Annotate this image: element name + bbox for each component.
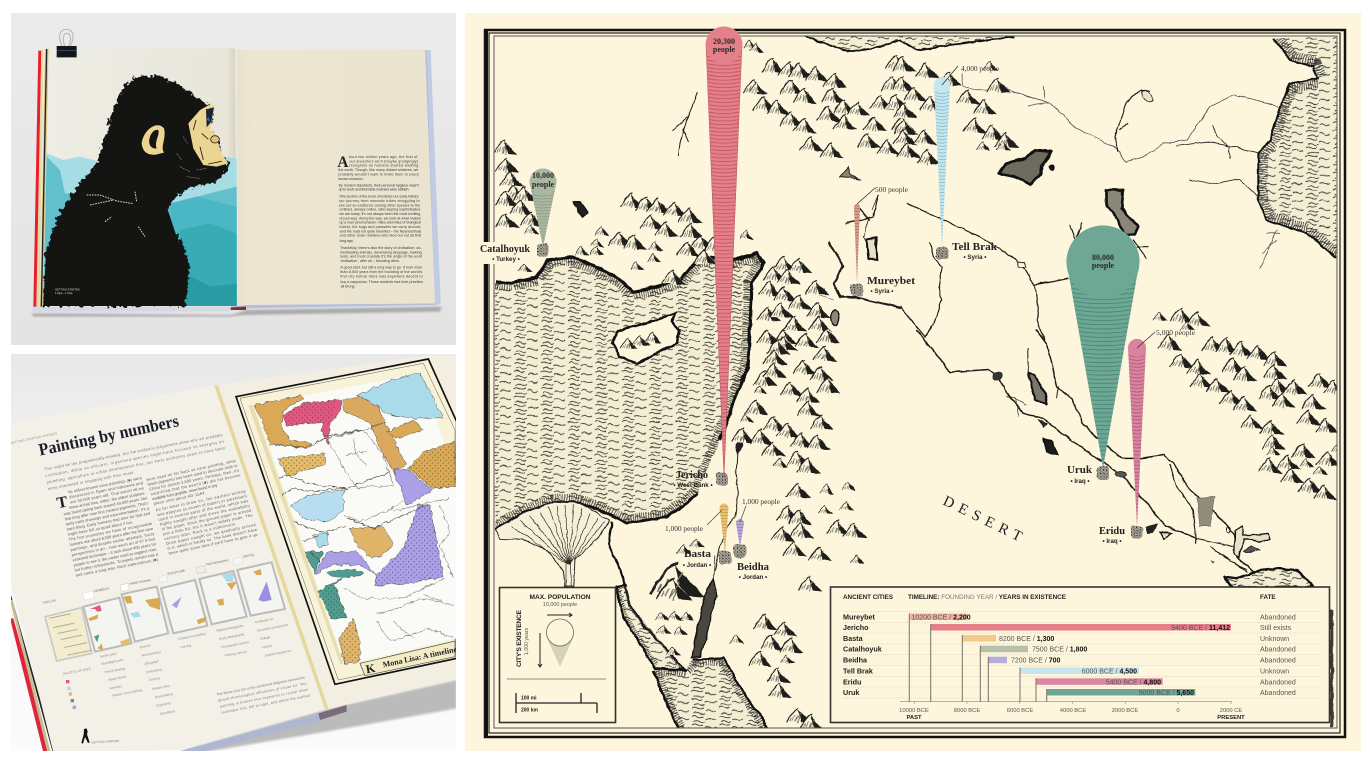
timeline headers xyxy=(843,594,1276,601)
row: Beidha: Abandoned xyxy=(1260,658,1296,665)
city: Catalhoyuk xyxy=(476,168,556,264)
column one: hard thing. Early humans had time for that and xyxy=(66,511,151,532)
axis: 10000 BCE xyxy=(899,708,929,714)
city name: Uruk xyxy=(1067,464,1093,476)
ape face xyxy=(177,104,228,178)
cone xyxy=(736,506,746,547)
legend box xyxy=(500,588,616,722)
row: Uruk: Abandoned xyxy=(1260,690,1296,697)
city: Jericho xyxy=(673,26,742,489)
marsh lakes xyxy=(1028,373,1047,405)
thumbnail captions: Mosaic Cave painting xyxy=(112,688,143,698)
thumbnail captions: Collage xyxy=(259,635,271,641)
cone xyxy=(1128,332,1155,527)
intro text block: up a man (short answer: miles and miles of biological xyxy=(339,221,421,225)
intro paragraph: more interested in engaging with their muse. xyxy=(47,470,135,491)
column one: fairly early drawings and experimentation. It's a xyxy=(65,505,150,527)
intro paragraph: plumbing, agriculture or urban development first, our early ancestors seem to have been xyxy=(46,445,225,485)
caption bar: Mona Lisa: A timeline of xyxy=(382,643,467,669)
intro text block: all wrong. xyxy=(341,285,355,289)
intro text block: and other close relatives who died out not all that xyxy=(340,234,421,238)
timeline headers: TIMELINE: FOUNDING YEAR / YEARS IN EXISTENCE xyxy=(908,594,1066,601)
desert label: DESERT xyxy=(940,493,1030,548)
row: Basta: Unknown xyxy=(1260,636,1289,643)
axis: 4000 BCE xyxy=(1060,708,1086,714)
thumbnail captions: Embossing xyxy=(146,667,162,674)
axis: 8000 BCE xyxy=(954,708,980,714)
axis: 2000 BCE xyxy=(1112,708,1138,714)
intro text block: our journey from nomadic tribes struggling to xyxy=(339,199,420,203)
city: Tell Brak: • Syria • xyxy=(964,254,986,261)
axis xyxy=(899,702,1245,721)
row: Mureybet: 10200 BCE / 2,200 xyxy=(912,614,971,622)
row: Catalhoyuk: 7500 BCE / 1,800 xyxy=(1032,647,1087,654)
row: Tell Brak: Unknown xyxy=(1260,668,1289,676)
city: Uruk: people xyxy=(1092,261,1115,270)
legend swatches above thumbnails: PRINT MAKING xyxy=(129,578,152,586)
scale bar: 200 km xyxy=(521,708,539,714)
column two: surprising that the pencil (■) did not become xyxy=(150,472,242,496)
page note: global chronological influences of visual art. The xyxy=(218,682,307,703)
intro text block: our ancestors we'd (maybe grudgingly) xyxy=(349,159,418,163)
ape ear xyxy=(142,125,165,155)
intro text block: recognise as humans started walking xyxy=(349,164,418,168)
map artwork xyxy=(493,34,1347,730)
panel: map background xyxy=(465,13,1361,751)
population callout: 5,000 people xyxy=(1156,328,1196,337)
page note: technique first, left to right, and where the method xyxy=(221,694,310,715)
thumbnail captions: Ancestry xyxy=(109,684,123,690)
intro text block: Thankfully, there's also the story of civilisation: do- xyxy=(340,246,422,250)
row: Tell Brak: Tell Brak xyxy=(843,666,873,676)
panel: book photo with painting by numbers spread: GETTING STARTED ANCIENT xyxy=(9,431,58,445)
row: Eridu xyxy=(843,677,1296,702)
row: Eridu: 5400 BCE / 4,800 xyxy=(1106,679,1161,686)
column two: was papyrus (a cousin of paper) or parchment xyxy=(156,493,248,517)
intro text block: A xyxy=(337,154,348,171)
row: Tell Brak xyxy=(843,666,1289,702)
thumbnail captions: Geometric perspective xyxy=(257,623,289,633)
intro text block: A good start, but still a long way to go. It took more xyxy=(340,266,422,270)
cone xyxy=(1066,226,1140,468)
binder clip xyxy=(57,29,77,57)
intro text block: probably wouldn't want to invite them to every xyxy=(338,172,419,176)
cone xyxy=(854,204,860,283)
intro text block: the earth. Though, like many distant relatives, we xyxy=(338,168,418,172)
intro text block: bout two million years ago, the first of xyxy=(349,155,418,159)
intro paragraph: civilisation. While an efficient, organised species might have focused its energies on xyxy=(45,439,224,478)
column one: discovered in Spain and Indonesia and xyxy=(69,480,143,499)
cone xyxy=(707,504,728,553)
city name: Jericho xyxy=(676,469,708,481)
page note xyxy=(216,675,310,715)
thumbnail captions: TIMELINE xyxy=(42,598,57,605)
row: Beidha: 7200 BCE / 700 xyxy=(1011,658,1061,665)
Jordan valley xyxy=(715,442,743,570)
axis: PAST xyxy=(906,715,922,721)
Sinai mountains xyxy=(650,563,824,730)
thumbnail captions xyxy=(42,598,291,716)
caption on illustration: GETTING STARTED xyxy=(55,287,80,291)
column one: humans are about 8,500 years after the first cave xyxy=(69,526,154,547)
city name: Basta xyxy=(684,548,712,560)
coloured page edges xyxy=(33,49,49,307)
thumbnail captions: Photograph camera xyxy=(221,640,249,649)
ape silhouette xyxy=(43,75,229,306)
colour key xyxy=(66,680,76,709)
scale bar xyxy=(516,693,597,714)
column one: and came a long way. Rock watercolours (■). xyxy=(75,557,160,578)
colour regions xyxy=(255,373,455,665)
height arrow xyxy=(538,633,542,667)
city name: Tell Brak xyxy=(952,241,998,253)
page note: painting is broken into segments to reveal when xyxy=(219,688,309,709)
column two: place until about AD 1564. xyxy=(153,490,206,506)
timeline headers: ANCIENT CITIES xyxy=(843,594,893,601)
legend swatches above thumbnails: PIGMENTS xyxy=(93,586,109,593)
intro text block: civilised, always-online, latte-sipping sophisticates xyxy=(339,208,421,212)
column one: was found dating back around 40,000 years. Not xyxy=(63,495,148,516)
city name: Eridu xyxy=(1099,525,1125,537)
city: Catalhoyuk: • Turkey • xyxy=(492,256,520,263)
row: Basta: 8200 BCE / 1,300 xyxy=(999,636,1054,643)
panel: book photo with painting by numbers spread xyxy=(9,354,467,753)
intro text block: eke out an existence among other species to the xyxy=(339,203,420,207)
thumbnail captions: Mosaic Inlay xyxy=(152,684,170,691)
column one xyxy=(55,475,160,579)
column one: people to see it, the earlier used to suggest man, xyxy=(73,546,158,567)
thumbnail captions: Carving xyxy=(180,643,192,649)
thumbnail captions: Wood printing xyxy=(141,650,161,658)
column two: of the paper. Once the ground paper is around xyxy=(161,508,252,532)
axis: 2000 CE xyxy=(1220,708,1242,714)
panel: book photo with painting by numbers spread: GETTING STARTED xyxy=(92,739,120,744)
column one: might have felt so good about it too. xyxy=(67,519,134,537)
city: Eridu xyxy=(1099,328,1196,545)
Persian Gulf xyxy=(1225,568,1313,588)
column one: are 40,000 years old. That wasn't all we xyxy=(70,485,144,505)
cone xyxy=(706,26,742,477)
right book page xyxy=(217,355,457,709)
intro paragraph: This might be the pragmatically-minded, but the evidence artguments show why art predates xyxy=(44,432,223,472)
column two: black pigments has been used to decorate cloth in xyxy=(147,463,238,487)
painting canvas xyxy=(255,373,457,665)
legend title: MAX. POPULATION xyxy=(529,594,591,601)
row: Catalhoyuk: Catalhoyuk xyxy=(843,645,882,654)
column two: been quite some time if we'll have to give it up. xyxy=(168,532,259,556)
lakes xyxy=(998,150,1052,185)
caption bar: K xyxy=(365,661,377,676)
painting outlines xyxy=(270,422,453,642)
vertical axis label: 1,000 years xyxy=(524,627,530,655)
intro text block: social occasion. xyxy=(338,177,364,181)
city: Mureybet: • Syria • xyxy=(871,288,893,295)
axis: PRESENT xyxy=(1217,715,1245,721)
column two: China for almost 3,500 years. Perhaps, then, it's xyxy=(148,468,240,492)
thumbnail captions: Mosaic xyxy=(262,643,273,649)
population label: 20,300 xyxy=(713,37,735,46)
row: Eridu: Eridu xyxy=(843,677,861,686)
city name: Beidha xyxy=(737,561,769,573)
thumbnail captions: Lithograph xyxy=(144,659,159,666)
population callout: 1,000 people xyxy=(665,524,704,533)
thumbnail captions: Casting & modelling xyxy=(178,632,206,641)
thumbnail captions: Watercolours xyxy=(108,674,127,682)
thumbnail captions: Etching xyxy=(149,676,160,682)
intro text block: first city before there was anywhere decent to xyxy=(340,274,423,278)
Cyprus xyxy=(612,313,679,363)
column two: in it, which is hardly so. The book doesn't have xyxy=(167,527,258,551)
left book page xyxy=(10,385,327,752)
row: Uruk: 5000 BCE / 5,650 xyxy=(1139,690,1194,697)
row: Uruk xyxy=(843,688,1296,702)
cone xyxy=(934,66,958,247)
Euphrates and southern rivers xyxy=(917,330,1333,727)
column one: he oldest-known cave paintings (■) were xyxy=(68,475,142,494)
row: Mureybet: Abandoned xyxy=(1260,614,1296,622)
thumbnail captions: Printing camera xyxy=(224,649,247,658)
column one: knew at that time, either: the oldest sculpture xyxy=(69,490,145,510)
width arrow xyxy=(547,613,572,617)
thumbnail captions: Acrylic paint xyxy=(99,651,117,659)
Tigris and tributaries north xyxy=(900,203,1148,340)
axis: 6000 BCE xyxy=(1007,708,1033,714)
heading: Painting by numbers xyxy=(37,411,181,460)
legend swatches above thumbnails: DIGITAL xyxy=(243,552,255,559)
teal landscape xyxy=(43,153,237,306)
city: Jericho: • West Bank • xyxy=(673,482,713,489)
rivers east xyxy=(962,73,1280,268)
book right page xyxy=(237,49,435,305)
panel: book photo with ape illustration xyxy=(11,13,456,345)
column two xyxy=(145,458,260,556)
city: Uruk: • Iraq • xyxy=(1070,478,1090,485)
intro text block: By modern standards, their personal hygiene wasn't xyxy=(339,183,419,187)
column one: paintings, and despite earlier attempts, fuzzy xyxy=(70,531,155,552)
city: Eridu: • Iraq • xyxy=(1102,538,1122,545)
city name: Mureybet xyxy=(867,275,915,287)
thumbnail captions: Computer art xyxy=(254,617,273,624)
row: Basta xyxy=(843,634,1289,702)
column two: As for what to draw on, the earliest writing xyxy=(155,489,246,512)
timeline panel xyxy=(830,587,1330,722)
column one: essential technique – it took about 400 years for xyxy=(72,541,157,562)
timeline headers: FATE xyxy=(1260,594,1276,601)
column two: used in several parts of the world, which was xyxy=(158,498,249,522)
Mediterranean Sea xyxy=(495,253,763,530)
population callout: 500 people xyxy=(875,185,909,194)
intro paragraph xyxy=(44,432,227,491)
city: Tell Brak xyxy=(934,64,1000,261)
thumbnail captions: Glassmaking xyxy=(154,692,173,699)
intro text block xyxy=(337,154,423,289)
map frame xyxy=(485,30,1345,737)
population callout: 4,000 people xyxy=(961,64,1000,73)
row: Mureybet xyxy=(843,612,1296,702)
legend cone xyxy=(546,619,574,667)
vertical axis label xyxy=(516,609,530,667)
painting frame xyxy=(236,359,467,684)
intro text block: mesticating animals, developing language, making xyxy=(340,250,422,254)
column one: but further refinements. Trumpets remain was a xyxy=(74,551,159,573)
column one: The first examples we have of recognisable xyxy=(68,521,153,542)
intro text block: This section of the book chronicles our early history: xyxy=(339,195,419,199)
intro text block: we are today. It's not always been the most exciting xyxy=(339,212,420,216)
legend swatches above thumbnails: PHOTOGRAPHY xyxy=(205,558,229,567)
city: Basta: • Jordan • xyxy=(683,562,711,569)
column two: just a little bit, but it wasn't widely made. The xyxy=(161,512,254,537)
intro text block: up to snuff, and their table manners were rubbish. xyxy=(339,188,409,192)
legend swatches above thumbnails xyxy=(83,552,255,600)
row: Mureybet: Mureybet xyxy=(843,612,876,622)
scale bar: 100 mi xyxy=(521,696,537,702)
population label: 10,000 xyxy=(532,171,554,180)
Nile delta xyxy=(495,502,627,587)
number pattern overlay xyxy=(278,400,455,665)
intro text block: long ago. xyxy=(340,239,354,243)
column one: that long after man first created pigments. That's xyxy=(64,500,149,522)
city: Catalhoyuk: people xyxy=(532,180,555,189)
intro text block: tubes), the bugs and parasites we carry around, xyxy=(339,225,421,229)
city: Beidha xyxy=(736,497,781,581)
population callout: 1,000 people xyxy=(742,497,781,506)
Caspian / Persian seas xyxy=(900,37,1337,340)
city: Jericho: people xyxy=(713,45,736,54)
column one: perspectives in art – how much art of it? A first xyxy=(71,536,156,557)
column two: were used as far back as cave painting, while xyxy=(145,458,237,482)
row: Jericho xyxy=(843,623,1292,702)
icon: walking figure xyxy=(81,728,90,744)
caption on illustration xyxy=(55,288,80,294)
book left page xyxy=(40,48,237,307)
axis: 0 xyxy=(1176,708,1180,714)
row: Jericho: 9400 BCE / 11,412 xyxy=(1171,625,1230,632)
population label: 80,000 xyxy=(1092,253,1114,262)
column one: T xyxy=(55,493,69,512)
row: Jericho: Jericho xyxy=(843,623,869,632)
city: Uruk xyxy=(1066,226,1140,485)
intro text block: of journeys. Along the way, we look at what makes xyxy=(339,216,421,220)
intro text block: and the road not quite travelled – the Neanderthals xyxy=(340,229,422,233)
row: Eridu: Abandoned xyxy=(1260,679,1296,686)
column two: century later, Rock is a millennium. xyxy=(164,521,237,541)
row: Jericho: Still exists xyxy=(1260,625,1292,632)
column two: available from graphite, never found in any xyxy=(151,482,218,501)
intro text block: than 8,500 years from the founding of the world's xyxy=(340,270,423,274)
row: Basta: Basta xyxy=(843,634,864,643)
vertical axis label: CITY'S EXISTENCE xyxy=(516,609,523,667)
city: Beidha: • Jordan • xyxy=(739,574,767,581)
column two: Once paper caught on, we gradually arrived xyxy=(165,522,256,546)
thumbnail captions: PALETTE OF APES xyxy=(63,667,91,676)
row: Uruk: Uruk xyxy=(843,688,859,697)
mountain ranges xyxy=(493,40,1347,564)
thumbnail captions: Spatial (impact) art xyxy=(264,649,291,658)
city name: Catalhoyuk xyxy=(480,243,531,255)
thumbnail captions: Woodblock xyxy=(159,709,176,716)
row: Catalhoyuk xyxy=(843,645,1296,702)
city: Basta xyxy=(665,504,728,569)
page note: The Mona Lisa (as is the combined diagram) represents xyxy=(216,675,305,697)
row: Tell Brak: 6000 BCE / 4,500 xyxy=(1082,668,1137,676)
row: Beidha xyxy=(843,656,1296,702)
timeline thumbnails xyxy=(45,562,285,661)
settlement markers xyxy=(537,244,1143,564)
Black Sea coast xyxy=(804,36,1014,52)
row: Beidha: Beidha xyxy=(843,656,868,665)
caption on illustration: 1 Mya – 1 Mya xyxy=(55,291,73,295)
intro text block: buy a cappucino. Those ancients had their priorities xyxy=(340,280,423,284)
thumbnail captions: Engraving xyxy=(156,701,171,708)
intro text block: tools, and most crucially it's the origin of the word xyxy=(340,255,422,259)
row separators xyxy=(843,612,1320,698)
rivers west xyxy=(573,93,900,325)
Red Sea with gulfs xyxy=(616,555,824,730)
caption bar xyxy=(360,641,467,676)
city: Mureybet xyxy=(854,185,915,295)
intro text block: 'civilisation', after all – founding cities. xyxy=(340,259,400,263)
thumbnail captions: Enamel xyxy=(139,643,151,649)
legend box: 10,000 people xyxy=(543,602,577,608)
cone xyxy=(530,168,556,247)
thumbnail captions: Blackflight paint xyxy=(101,658,124,666)
column two: highly sought-after and drove the availability xyxy=(159,503,250,527)
thumbnail captions: Pencil drawing xyxy=(104,666,126,674)
thumbnail captions: Digital photography xyxy=(216,623,244,633)
row: Catalhoyuk: Abandoned xyxy=(1260,647,1296,654)
thumbnail captions: Early photography xyxy=(219,632,245,641)
legend swatches above thumbnails: SCULPTURE xyxy=(167,569,185,576)
